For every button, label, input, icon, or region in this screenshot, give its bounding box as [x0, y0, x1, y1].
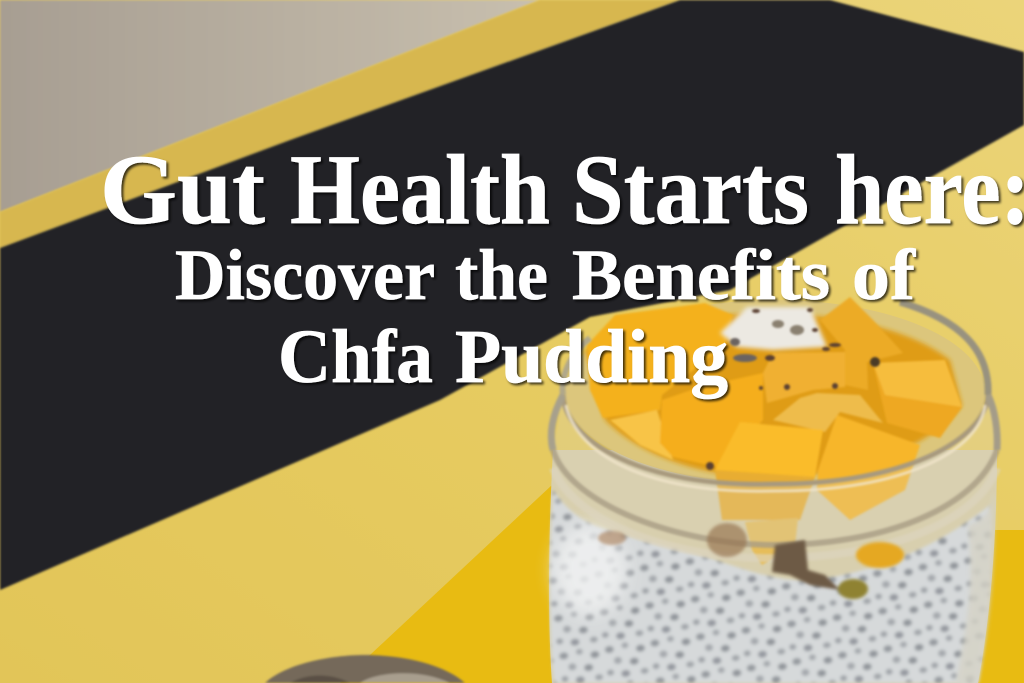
cube centre left: [660, 373, 763, 467]
chia pudding jar: [549, 297, 997, 683]
title line 1: [100, 134, 1024, 245]
title line 2: Discover: [175, 235, 435, 315]
title line 3: [278, 315, 728, 399]
seed debris under rim: [598, 523, 904, 599]
pudding layer: [550, 490, 990, 683]
yellow napkin right: [965, 530, 1024, 683]
jar rim rings: [551, 302, 997, 558]
title line 1: Health: [290, 134, 550, 245]
title line 1: Starts: [572, 134, 809, 245]
cube front right: [817, 415, 920, 520]
background: beige wall: [0, 0, 540, 212]
title line 2: the: [455, 235, 548, 315]
jar glass body: [549, 450, 997, 683]
title line 3: Chfa: [278, 315, 433, 399]
cube back right: [820, 297, 903, 390]
mango cubes: [587, 297, 962, 565]
title line 3: Pudding: [455, 315, 728, 399]
glass tint over threads: [553, 395, 997, 547]
title line 1: Gut: [100, 134, 265, 245]
glossy cube: [773, 393, 883, 432]
cube centre: [763, 352, 845, 403]
mango base fill: [585, 314, 962, 478]
cube front top: [715, 422, 823, 477]
title line 2: Benefits: [572, 235, 830, 315]
white cream with seeds: [706, 307, 880, 470]
cube top left: [587, 303, 733, 418]
background: ochre band: [0, 0, 680, 248]
title line 2: of: [852, 235, 916, 315]
cube right: [873, 360, 962, 438]
title line 2: [175, 235, 916, 315]
cube front lower: [715, 470, 815, 520]
cube below rim: [745, 518, 798, 565]
cube small left: [610, 410, 673, 460]
title: [100, 134, 1024, 399]
jar shade right: [956, 490, 994, 683]
jar interior: [565, 300, 985, 484]
spoon: [265, 655, 465, 683]
pudding highlight: [554, 525, 626, 615]
yellow napkin left: [340, 485, 560, 683]
